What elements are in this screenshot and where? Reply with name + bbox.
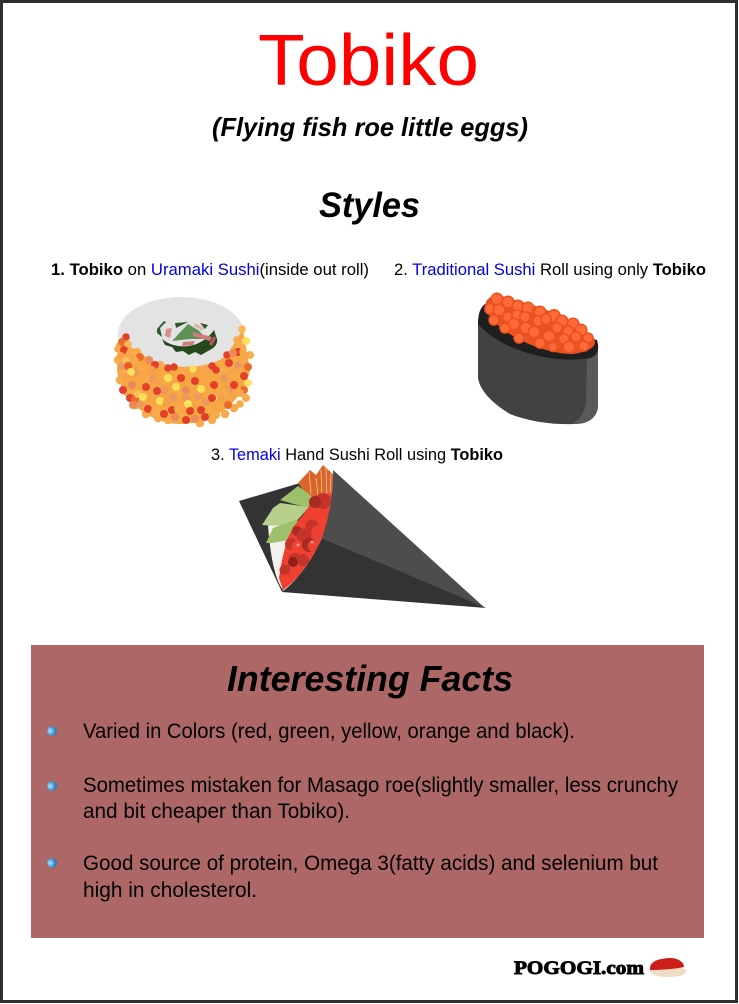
fact 3 [83, 852, 658, 902]
fact 3: high in cholesterol. [83, 879, 257, 902]
gunkan roe eggs [485, 293, 593, 353]
uramaki filling [157, 321, 217, 355]
fact 2: and bit cheaper than Tobiko). [83, 800, 350, 823]
temaki leaves [262, 486, 313, 543]
panel: interesting facts [31, 645, 704, 938]
style 1 caption: 1. Tobiko on Uramaki Sushi(inside out roll) [51, 261, 369, 279]
tobiko roe coating [114, 325, 254, 427]
footer logo text: POGOGI.com [514, 958, 644, 979]
bullet icon 3 [47, 858, 57, 868]
bullet icon 1 [47, 726, 57, 736]
temaki roe eggs [280, 493, 331, 586]
fact 2 [83, 774, 678, 823]
illustration: uramaki roll [114, 297, 254, 427]
fact 3: Good source of protein, Omega 3(fatty acids) and selenium but [83, 852, 658, 875]
title: Tobiko [258, 21, 479, 101]
style 3 caption: 3. Temaki Hand Sushi Roll using Tobiko [211, 446, 503, 464]
bullet icon 2 [47, 781, 57, 791]
style 2 caption: 2. Traditional Sushi Roll using only Tobiko [394, 261, 706, 279]
icon: sushi logo [650, 958, 686, 977]
heading: interesting facts: Interesting Facts [227, 658, 513, 699]
illustration: temaki hand roll [239, 465, 486, 608]
fact 2: Sometimes mistaken for Masago roe(slightly smaller, less crunchy [83, 774, 678, 797]
fact 1: Varied in Colors (red, green, yellow, orange and black). [83, 720, 575, 743]
subtitle: (Flying fish roe little eggs) [212, 112, 528, 142]
illustration: gunkan sushi roll [478, 293, 598, 424]
heading: styles: Styles [319, 186, 420, 225]
